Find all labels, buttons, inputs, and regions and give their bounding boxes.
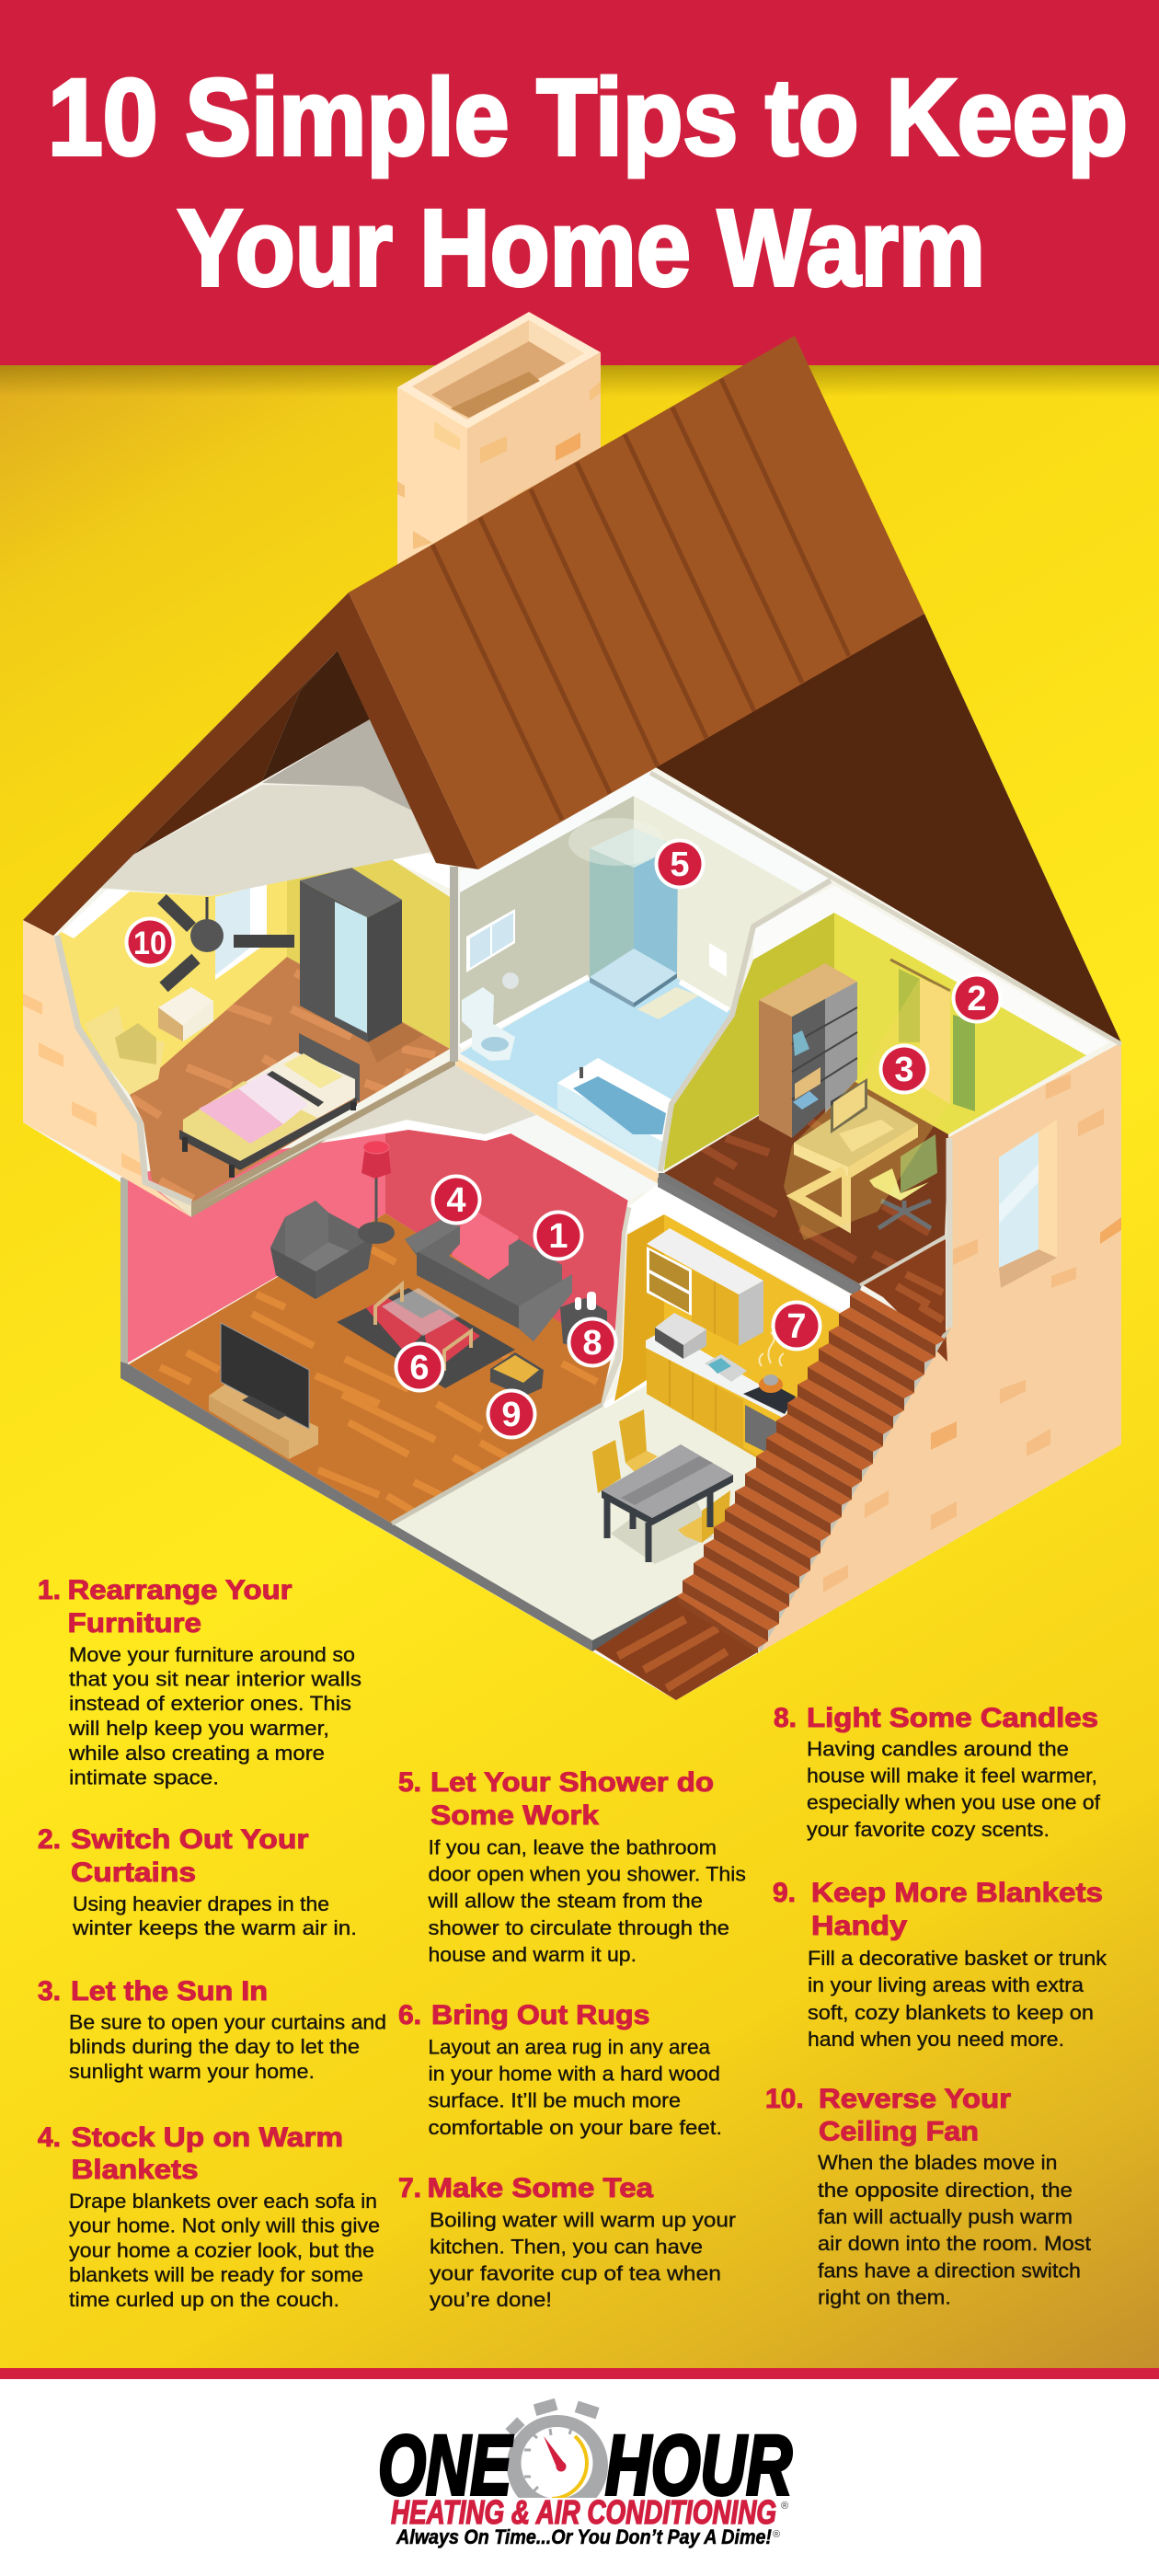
toilet (462, 987, 515, 1061)
bedroom (23, 853, 458, 1217)
exterior window (999, 1120, 1057, 1288)
living room floor (129, 1213, 612, 1524)
tip 3: blinds during the day to let the (69, 2035, 360, 2058)
marker 8: 8 (582, 1324, 602, 1363)
tip 9: in your living areas with extra (808, 1973, 1084, 1996)
office floor (664, 1070, 948, 1285)
tip 5: door open when you shower. This (429, 1862, 746, 1886)
stair stringer (750, 1328, 951, 1651)
attic interior (97, 650, 436, 896)
marker 5: 5 (670, 845, 690, 884)
marker 10 (125, 916, 175, 968)
tip 7 (398, 2173, 736, 2311)
bathroom floor (460, 952, 732, 1170)
footer band (0, 2368, 1159, 2576)
bathroom ceiling trim (460, 771, 831, 892)
tip 1: will help keep you warmer, (68, 1717, 329, 1740)
bath mat (637, 987, 699, 1019)
marker 1 (534, 1211, 583, 1260)
tip 10: Reverse Your (819, 2084, 1011, 2114)
tip 10: fans have a direction switch (818, 2260, 1081, 2282)
oven (745, 1405, 779, 1452)
tip 1: instead of exterior ones. This (69, 1692, 351, 1715)
wordmark ONE HOUR: HOUR (605, 2419, 792, 2513)
marker 7: 7 (786, 1307, 807, 1346)
marker 2: 2 (967, 980, 987, 1018)
tip 10: Ceiling Fan (819, 2116, 979, 2147)
stopwatch icon (506, 2398, 608, 2498)
tip 6: in your home with a hard wood (429, 2063, 720, 2086)
wall trim beside stairs (946, 1138, 953, 1328)
base cabinets (647, 1348, 765, 1463)
tip 7: your favorite cup of tea when (430, 2261, 721, 2284)
tip 10: the opposite direction, the (818, 2179, 1073, 2202)
rug (337, 1288, 515, 1388)
yellow armchair (85, 1006, 165, 1095)
tip 5: will allow the steam from the (427, 1890, 703, 1912)
tip 1: that you sit near interior walls (69, 1667, 361, 1691)
tip 6 (398, 2000, 722, 2139)
tip 3: sunlight warm your home. (69, 2060, 315, 2083)
television (221, 1323, 309, 1429)
wordmark ONE HOUR: ONE (378, 2419, 513, 2513)
ceiling fan (162, 897, 294, 987)
upper cabinets (647, 1228, 763, 1346)
tip 5: house and warm it up. (429, 1943, 637, 1966)
wardrobe (300, 868, 423, 1063)
tip 5: 5. (398, 1767, 421, 1798)
tip 2 (38, 1824, 357, 1939)
tip 3 (38, 1976, 386, 2083)
tip 7: 7. (398, 2173, 421, 2203)
tip 5: Some Work (430, 1800, 599, 1831)
bookshelf (759, 963, 857, 1138)
marker 6 (394, 1341, 445, 1393)
logo (378, 2398, 792, 2548)
tip 4: your home a cozier look, but the (69, 2239, 374, 2261)
sun beam (784, 978, 950, 1240)
tip 10: air down into the room. Most (818, 2232, 1091, 2255)
nightstand (158, 987, 213, 1041)
desk (794, 1095, 918, 1225)
exterior left wall (23, 920, 191, 1217)
tip 9: hand when you need more. (808, 2028, 1064, 2051)
tip 8: 8. (774, 1703, 797, 1733)
tip 4 (38, 2122, 380, 2311)
tip 10: fan will actually push warm (818, 2205, 1073, 2228)
shower (568, 818, 678, 1007)
tip 9: soft, cozy blankets to keep on (808, 2001, 1094, 2024)
side table with candles (560, 1292, 607, 1352)
yellow background (0, 365, 1159, 2368)
roof underside (654, 614, 1121, 1042)
office (659, 880, 1109, 1297)
tip 7: you’re done! (430, 2288, 552, 2311)
marker 3: 3 (894, 1051, 914, 1089)
ottoman (490, 1352, 544, 1397)
header banner (0, 0, 1159, 365)
registered marks: ® (781, 2501, 788, 2512)
chairs (592, 1409, 730, 1543)
tip 6: comfortable on your bare feet. (429, 2116, 722, 2139)
tip 4: blankets will be ready for some (69, 2263, 363, 2286)
tip 1 (38, 1575, 361, 1788)
sink (705, 1354, 747, 1382)
marker 3 (879, 1043, 929, 1095)
tip 8 (774, 1703, 1101, 1841)
lower wood floor (595, 1594, 759, 1700)
tip 1: Move your furniture around so (69, 1643, 355, 1666)
roof battens (432, 379, 849, 820)
stove (743, 1383, 796, 1414)
bathtub (557, 1058, 671, 1170)
logo subtitle: HEATING & AIR CONDITIONING (391, 2493, 776, 2531)
living room (120, 1120, 628, 1535)
toilet paper (502, 972, 519, 989)
tip 3: Be sure to open your curtains and (69, 2011, 386, 2033)
tip 1: Furniture (68, 1608, 201, 1639)
marker 8 (567, 1317, 618, 1367)
title: Your Home Warm (178, 188, 985, 309)
tip 6: surface. It’ll be much more (429, 2089, 681, 2112)
marker 9: 9 (501, 1396, 522, 1434)
tip 5: If you can, leave the bathroom (429, 1836, 717, 1858)
staircase (677, 1290, 946, 1653)
floor lamp (358, 1141, 395, 1244)
landing floor (860, 1236, 947, 1362)
curtain rod and window (890, 960, 975, 1111)
tip 10: right on them. (818, 2285, 951, 2309)
tip 8: house will make it feel warmer, (807, 1765, 1097, 1787)
marker 1: 1 (548, 1217, 568, 1256)
wordmark ONE HOUR (378, 2419, 792, 2513)
tip 4: time curled up on the couch. (69, 2288, 339, 2311)
dining floor (392, 1382, 773, 1651)
tip 8: especially when you use one of (807, 1790, 1101, 1814)
steam (759, 1332, 784, 1366)
tip 7: Make Some Tea (427, 2173, 653, 2203)
tip 3: 3. (38, 1976, 61, 2007)
kitchen (600, 1178, 858, 1472)
countertop (646, 1329, 791, 1419)
tip 4: 4. (38, 2122, 61, 2153)
armchair (270, 1201, 373, 1299)
marker 4 (430, 1174, 482, 1225)
bathroom (456, 771, 831, 1187)
tip 2: Using heavier drapes in the (73, 1892, 329, 1915)
towel (709, 943, 727, 977)
marker 2 (951, 973, 1003, 1023)
tip 10: When the blades move in (818, 2151, 1058, 2174)
tip 10 (765, 2084, 1091, 2309)
roof (23, 336, 1121, 1044)
tip 4: your home. Not only will this give (69, 2214, 380, 2237)
tip 6: Layout an area rug in any area (429, 2035, 711, 2059)
tip 2: Switch Out Your (71, 1824, 309, 1855)
bedroom window (215, 883, 267, 980)
tip 1: while also creating a more (68, 1742, 325, 1765)
tip 2: Curtains (71, 1857, 196, 1888)
bedroom and living room shared ceiling (201, 1065, 536, 1205)
tip 2: 2. (38, 1824, 61, 1855)
tip 8: Light Some Candles (807, 1703, 1098, 1733)
house base silhouette (23, 592, 1121, 1700)
bathroom window (466, 909, 515, 972)
tip 9: Fill a decorative basket or trunk (808, 1947, 1107, 1970)
marker 10: 10 (133, 926, 166, 961)
sofa (405, 1213, 572, 1341)
kettle (759, 1374, 783, 1393)
tip 4: Drape blankets over each sofa in (69, 2190, 377, 2213)
tip 4: Blankets (72, 2155, 199, 2185)
dining set (592, 1409, 733, 1564)
tip 9: Handy (811, 1911, 907, 1941)
tip 5: shower to circulate through the (429, 1916, 729, 1939)
tip 5: Let Your Shower do (430, 1767, 714, 1798)
tip 8: Having candles around the (807, 1737, 1069, 1761)
white band above kitchen and living wall (485, 1115, 659, 1201)
roof plane (349, 336, 924, 869)
coffee table (375, 1284, 471, 1371)
tip 9 (773, 1878, 1107, 2051)
tip 4: Stock Up on Warm (72, 2122, 343, 2153)
tip 1: 1. (38, 1575, 61, 1605)
tip 5 (398, 1767, 746, 1966)
table top (602, 1444, 733, 1518)
tip 2: winter keeps the warm air in. (72, 1916, 357, 1939)
tip 9: 9. (773, 1878, 796, 1908)
logo tagline: Always On Time...Or You Don’t Pay A Dime! (396, 2525, 772, 2548)
tip 6: Bring Out Rugs (431, 2000, 649, 2030)
chimney (397, 312, 601, 607)
marker 6: 6 (409, 1349, 430, 1387)
tip 6: 6. (398, 2000, 421, 2030)
title (48, 57, 1128, 309)
registered marks (773, 2501, 788, 2540)
tip 3: Let the Sun In (71, 1976, 268, 2007)
roof gable edge (23, 592, 478, 936)
tip 9: Keep More Blankets (811, 1878, 1103, 1908)
registered marks: ® (773, 2529, 780, 2540)
tip 8: your favorite cozy scents. (807, 1818, 1050, 1841)
marker 7 (771, 1301, 822, 1351)
bed (179, 1033, 360, 1178)
office chair (869, 1134, 937, 1228)
bedroom floor (130, 957, 450, 1202)
exterior right wall with window and bricks (761, 1042, 1121, 1651)
tip 7: Boiling water will warm up your (430, 2208, 736, 2231)
tip 1: Rearrange Your (68, 1575, 293, 1605)
microwave (655, 1313, 706, 1359)
computer (831, 1078, 894, 1152)
tip 1: intimate space. (69, 1766, 219, 1788)
tip 10: 10. (765, 2084, 804, 2114)
marker 4: 4 (446, 1181, 466, 1220)
marker 9 (486, 1389, 537, 1439)
tv stand (209, 1383, 318, 1459)
tip 7: kitchen. Then, you can have (430, 2235, 703, 2258)
marker 5 (655, 839, 705, 889)
